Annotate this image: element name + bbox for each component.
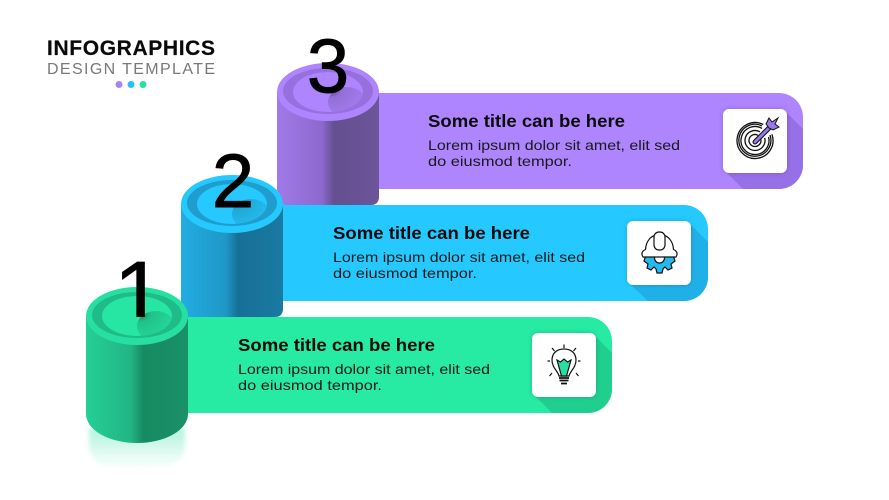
decorative dots (116, 81, 146, 88)
cylinder 1 top (86, 287, 188, 345)
text: step 1 title: Some title can be here (238, 335, 435, 355)
text: step 2 body (333, 249, 585, 281)
icon card: helmet (627, 221, 691, 285)
text: step 2 title: Some title can be here (333, 223, 530, 243)
long shadow 1 (536, 337, 612, 413)
cylinder 2 (181, 175, 283, 317)
cylinder 2 top (181, 175, 283, 233)
text: step 3 body: do eiusmod tempor. (428, 153, 572, 169)
text: step 1 body: Lorem ipsum dolor sit amet, elit sed (238, 361, 490, 377)
text: step 2 body: Lorem ipsum dolor sit amet, elit sed (333, 249, 585, 265)
title block (47, 37, 215, 88)
icon: helmet and gear (642, 232, 677, 273)
panel: step 3 bar (378, 93, 803, 189)
long shadow 3 (727, 113, 803, 189)
icon: target with arrow (737, 118, 779, 159)
cylinder 3 (277, 63, 379, 205)
number 1: 1 (113, 243, 165, 345)
text: step 1 body: do eiusmod tempor. (238, 377, 382, 393)
text: step 2 body: do eiusmod tempor. (333, 265, 477, 281)
cylinder 3 top (277, 63, 379, 121)
text: step 3 body: Lorem ipsum dolor sit amet, elit sed (428, 137, 680, 153)
long shadow 2 (631, 225, 708, 301)
text: step 3 body (428, 137, 680, 169)
icon card: target (723, 109, 787, 173)
reflection under cylinder 1 (89, 428, 185, 470)
number 2: 2 (212, 139, 254, 224)
text: step 1 body (238, 361, 490, 393)
panel: step 2 bar (283, 205, 708, 301)
panel: step 1 bar (188, 317, 612, 413)
icon card: light bulb (532, 333, 596, 397)
cylinder 1 (86, 287, 188, 443)
number 3: 3 (307, 24, 349, 110)
subheading: design template: DESIGN TEMPLATE (47, 61, 215, 78)
text: step 3 title: Some title can be here (428, 111, 625, 131)
icon: light bulb (548, 344, 580, 384)
heading: infographics: INFOGRAPHICS (47, 37, 215, 60)
